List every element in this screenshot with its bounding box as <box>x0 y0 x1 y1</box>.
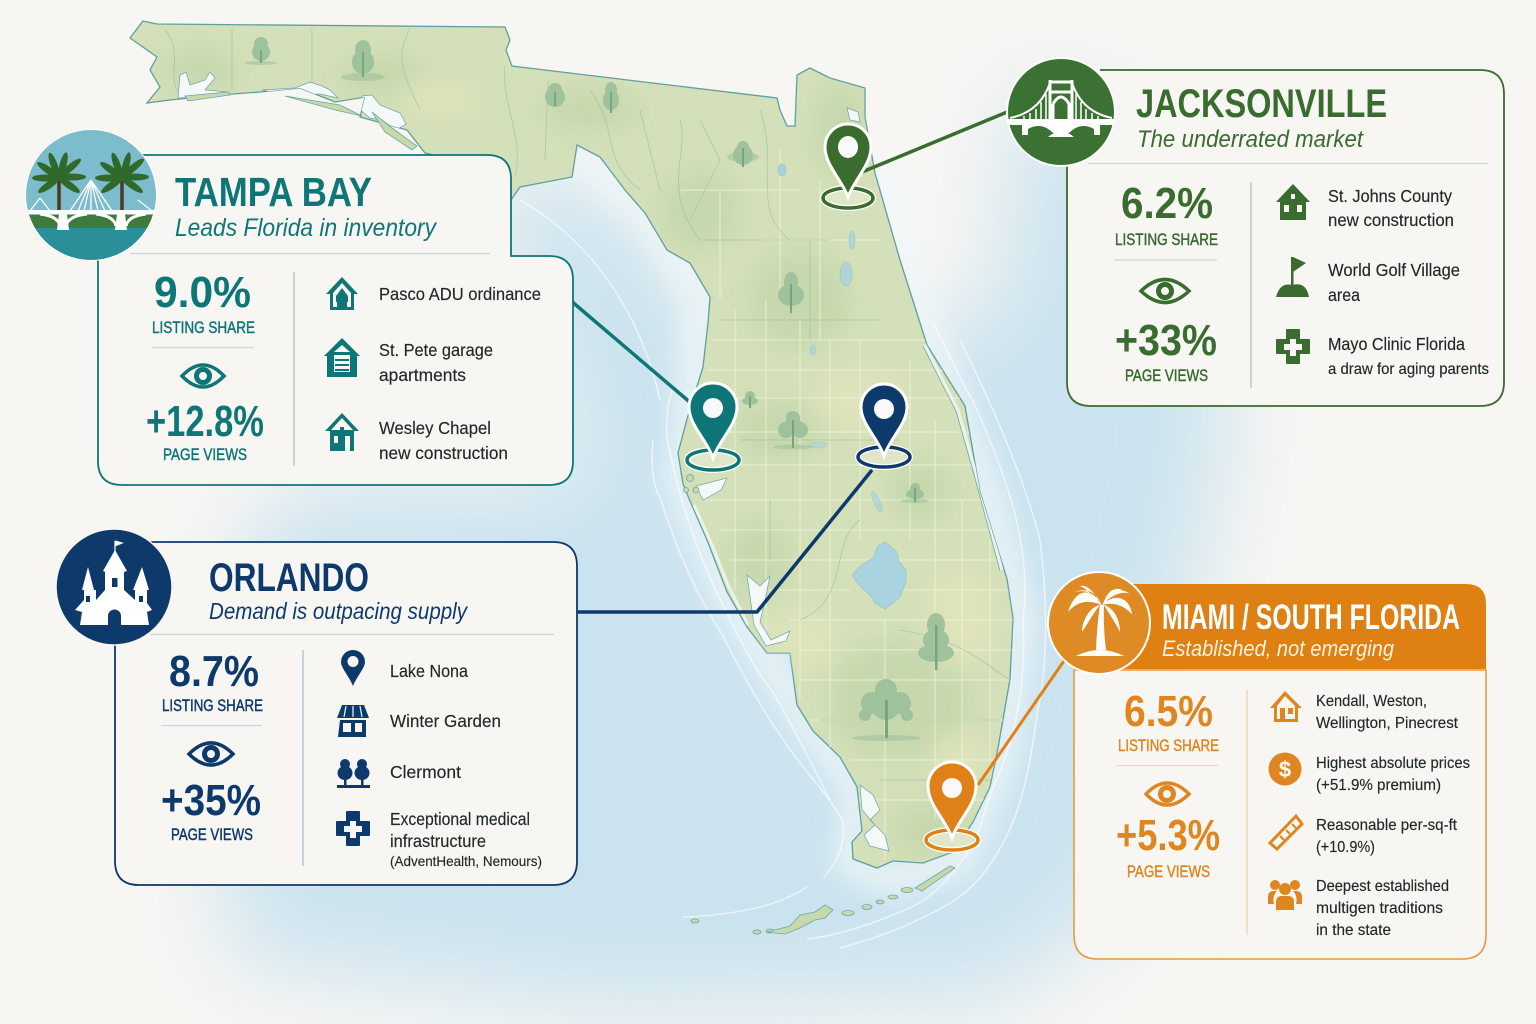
item: St. Pete <box>379 340 493 385</box>
item: per-sq-ft <box>1316 817 1458 856</box>
stat: page views <box>161 776 261 844</box>
map of Florida <box>130 21 1015 934</box>
shoreline glow <box>520 150 1046 948</box>
panel shape <box>1067 70 1504 406</box>
item: Kendall: Kendall, Weston, <box>1316 693 1427 710</box>
icon: dollar: $ <box>1279 757 1291 782</box>
stat: listing share <box>162 647 263 715</box>
item: medical infrastructure: infrastructure <box>390 831 486 851</box>
item: St. Pete: apartments <box>379 365 466 385</box>
icon: eye <box>182 365 224 387</box>
stat: listing share <box>1115 179 1218 249</box>
leader line: Tampa Bay <box>570 300 692 404</box>
badge: Tampa bridge and palms <box>25 128 158 264</box>
item: multigen: in the state <box>1316 922 1391 939</box>
item: medical infrastructure <box>390 809 542 869</box>
bays and lagoons <box>178 72 889 851</box>
icon: ruler <box>1270 816 1302 849</box>
item: St. Johns County <box>1328 186 1454 230</box>
badge: Orlando castle <box>56 529 172 645</box>
stat: page views: PAGE VIEWS <box>163 446 247 464</box>
item: per-sq-ft: (+10.9%) <box>1316 839 1375 856</box>
stat: page views <box>1115 316 1217 385</box>
title: ORLANDO <box>209 556 369 600</box>
stat: listing share <box>152 268 255 337</box>
stat: page views: +33% <box>1115 316 1217 365</box>
item: multigen: multigen traditions <box>1316 900 1443 917</box>
stat: listing share: LISTING SHARE <box>152 319 255 337</box>
trees <box>245 37 954 741</box>
pin: Miami <box>926 762 978 850</box>
icon: golf flag <box>1276 257 1309 297</box>
item: Mayo Clinic: Mayo Clinic Florida <box>1328 334 1465 354</box>
ocean watercolor wash <box>210 90 1230 1010</box>
item: Lake Nona: Lake Nona <box>390 661 468 681</box>
panel shape <box>1074 670 1486 959</box>
lakes <box>778 164 906 609</box>
stat: listing share: 6.2% <box>1121 179 1213 228</box>
stat: page views: +35% <box>161 776 261 825</box>
coastal barrier islands <box>185 92 699 493</box>
item: Winter Garden: Winter Garden <box>390 711 501 731</box>
item: Kendall <box>1316 693 1459 732</box>
panel: Miami / South Florida <box>1048 572 1486 959</box>
item: Wesley Chapel: Wesley Chapel <box>379 418 491 438</box>
stat: page views <box>146 397 264 464</box>
subtitle: Established, not emerging <box>1162 636 1395 661</box>
item: Wesley Chapel <box>379 418 508 463</box>
item: multigen <box>1316 878 1449 939</box>
icon: medical cross <box>1276 329 1310 364</box>
panel: Jacksonville <box>1006 57 1504 406</box>
item: per-sq-ft: Reasonable per-sq-ft <box>1316 817 1458 834</box>
icon: house <box>326 277 358 310</box>
florida keys <box>691 866 955 934</box>
pin: Jacksonville <box>823 124 873 208</box>
stat: page views: PAGE VIEWS <box>1125 367 1208 385</box>
item: multigen: Deepest established <box>1316 878 1449 895</box>
item: Mayo Clinic <box>1328 334 1489 378</box>
panel: Orlando <box>56 529 577 885</box>
item: medical infrastructure: Exceptional medical <box>390 809 530 829</box>
item: medical infrastructure: (AdventHealth, Nemours) <box>390 853 542 869</box>
item: prices: (+51.9% premium) <box>1316 777 1441 794</box>
item: Mayo Clinic: a draw for aging parents <box>1328 361 1489 378</box>
stat: page views: +5.3% <box>1116 811 1220 860</box>
icon: garage <box>324 338 360 377</box>
subtitle: The underrated market <box>1137 126 1364 153</box>
stat: listing share: LISTING SHARE <box>1118 737 1219 755</box>
icon: dollar <box>1268 752 1302 786</box>
stat: page views: PAGE VIEWS <box>1127 863 1210 881</box>
leader line: Jacksonville <box>862 110 1012 172</box>
panel shape <box>115 542 577 885</box>
icon: people <box>1268 880 1302 910</box>
stat: page views: PAGE VIEWS <box>171 826 253 844</box>
item: St. Johns County: new construction <box>1328 210 1454 230</box>
item: World Golf Village <box>1328 260 1460 305</box>
header band <box>1090 584 1486 669</box>
leader line: Orlando <box>575 470 872 612</box>
icon: eye <box>189 743 233 765</box>
badge: Jacksonville bridge <box>1006 57 1116 167</box>
map shading blotches <box>160 50 970 855</box>
pin: Orlando <box>858 384 910 467</box>
subtitle: Leads Florida in inventory <box>175 214 437 242</box>
item: Pasco: Pasco ADU ordinance <box>379 284 541 304</box>
item: St. Pete: St. Pete garage <box>379 340 493 360</box>
icon: trees <box>337 759 370 788</box>
leader line: Miami <box>978 658 1066 785</box>
panel shape <box>98 155 573 485</box>
county lines <box>680 150 1015 860</box>
icon: eye <box>1141 280 1189 302</box>
item: prices: Highest absolute prices <box>1316 755 1470 772</box>
icon: house <box>1276 184 1310 220</box>
stat: listing share: 6.5% <box>1124 687 1213 736</box>
stat: listing share <box>1118 687 1219 755</box>
icon: storefront <box>337 705 369 737</box>
item: World Golf Village: World Golf Village <box>1328 260 1460 280</box>
item: Clermont: Clermont <box>390 762 461 782</box>
title: JACKSONVILLE <box>1136 82 1387 126</box>
subtitle: Demand is outpacing supply <box>209 598 468 624</box>
item: World Golf Village: area <box>1328 285 1360 305</box>
stat: listing share: LISTING SHARE <box>162 697 263 715</box>
item: Kendall: Wellington, Pinecrest <box>1316 715 1459 732</box>
icon: eye <box>1146 783 1189 805</box>
icon: pin <box>341 650 365 686</box>
icon: house <box>325 413 359 451</box>
stat: page views <box>1116 811 1220 881</box>
title: TAMPA BAY <box>175 169 372 215</box>
panel: Tampa Bay <box>25 128 573 485</box>
stat: listing share: LISTING SHARE <box>1115 231 1218 249</box>
stat: page views: +12.8% <box>146 397 264 446</box>
stat: listing share: 9.0% <box>154 268 251 317</box>
icon: house <box>1270 691 1302 722</box>
item: prices <box>1316 755 1470 794</box>
item: Wesley Chapel: new construction <box>379 443 508 463</box>
icon: medical cross <box>336 811 370 846</box>
stat: listing share: 8.7% <box>169 647 259 696</box>
item: St. Johns County: St. Johns County <box>1328 186 1452 206</box>
badge: palm tree <box>1048 572 1150 674</box>
pin: Tampa Bay <box>687 383 739 470</box>
